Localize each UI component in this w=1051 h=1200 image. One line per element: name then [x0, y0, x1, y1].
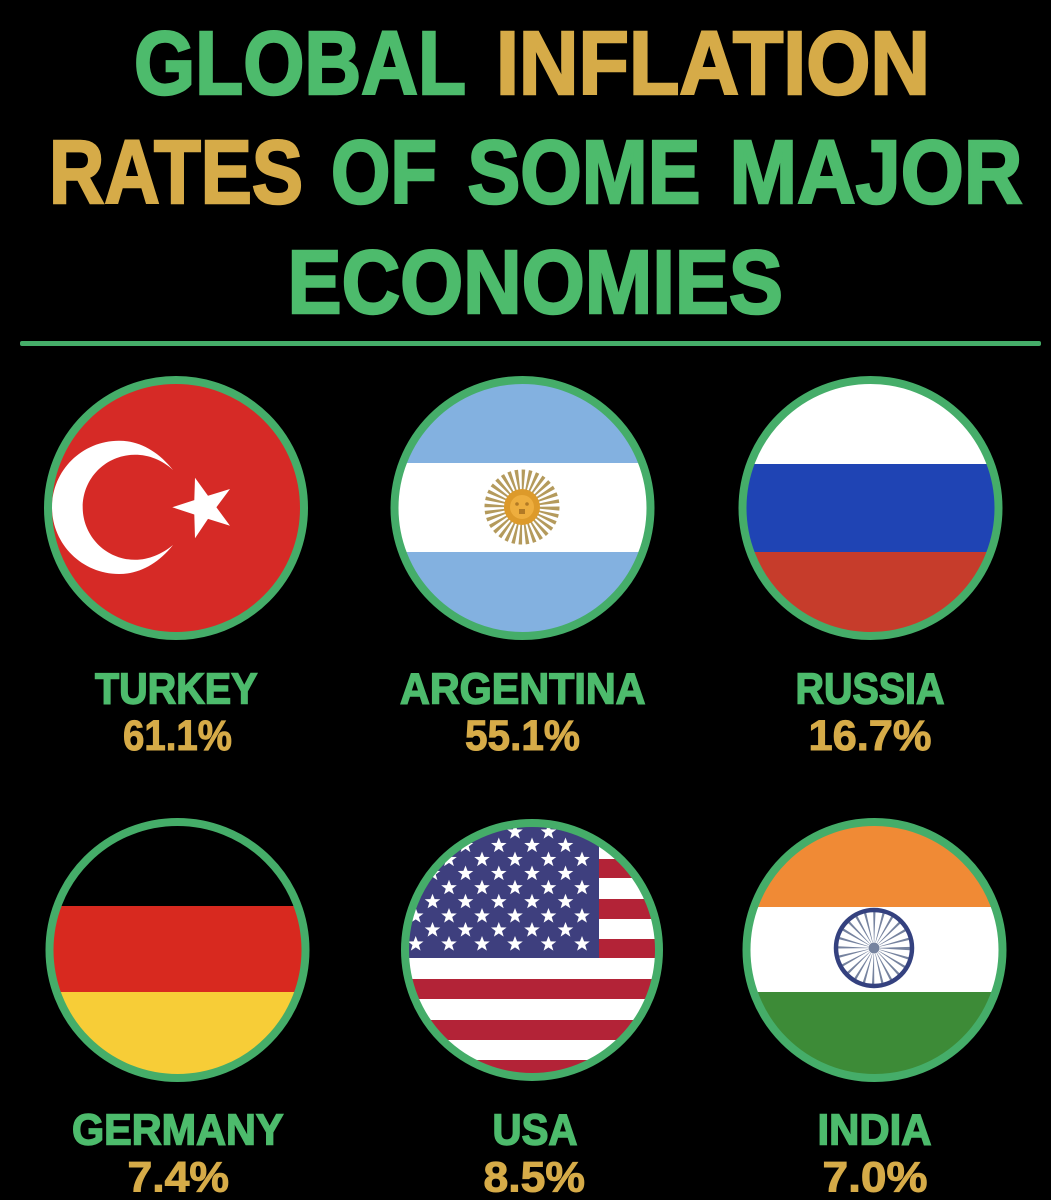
- title: MAJOR: [730, 123, 1022, 223]
- value: Argentina: 55.1%: [465, 712, 580, 760]
- label: Russia: RUSSIA: [796, 664, 944, 714]
- label: India: INDIA: [818, 1106, 932, 1154]
- title: [49, 14, 1022, 333]
- flag: Turkey: [48, 380, 304, 636]
- value: Russia: 16.7%: [808, 712, 932, 760]
- label: USA: USA: [492, 1106, 578, 1154]
- label: Turkey: TURKEY: [95, 664, 258, 714]
- flag: Germany: [45, 818, 315, 1084]
- panel: Russia: [735, 375, 1005, 760]
- panel: India: [740, 818, 1010, 1200]
- label: Argentina: ARGENTINA: [400, 664, 646, 714]
- title: ECONOMIES: [288, 233, 783, 333]
- panel: Argentina: [390, 375, 660, 760]
- value: Turkey: 61.1%: [123, 712, 232, 760]
- title: OF: [331, 123, 437, 223]
- flag: Argentina: [390, 375, 660, 642]
- panel: USA: [400, 820, 670, 1200]
- title: RATES: [49, 123, 303, 223]
- flag: USA: [400, 820, 670, 1085]
- panel: Germany: [45, 818, 315, 1200]
- title: GLOBAL: [134, 14, 466, 114]
- title: INFLATION: [496, 14, 930, 114]
- label: Germany: GERMANY: [72, 1106, 284, 1154]
- title: SOME: [468, 123, 700, 223]
- panel: Turkey: [48, 380, 304, 760]
- flag: Russia: [735, 375, 1005, 642]
- flag: India: [740, 818, 1010, 1084]
